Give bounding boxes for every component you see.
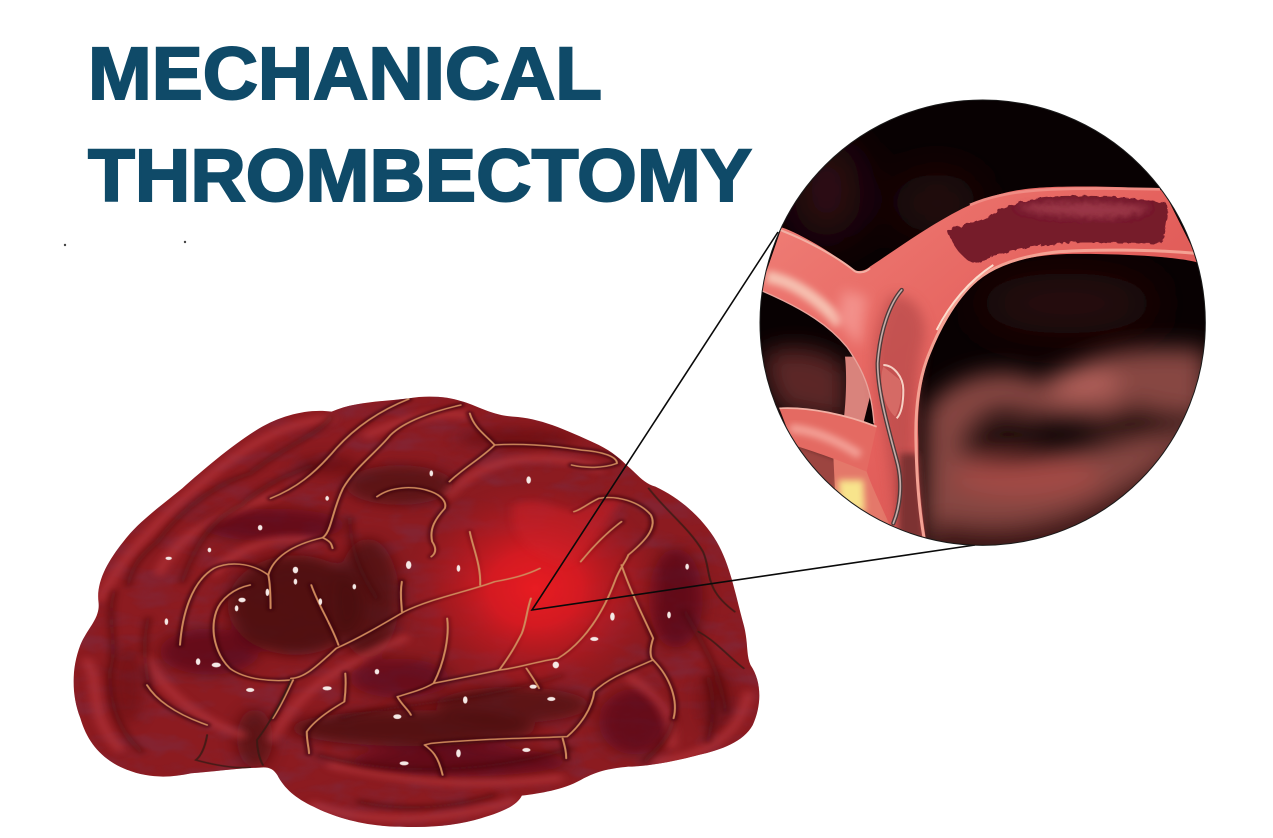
- brain: specular highlights: [165, 470, 689, 765]
- brain: dark lower veins: [196, 488, 744, 768]
- brain: veins: [147, 399, 675, 775]
- left lower backdrop: [798, 446, 835, 488]
- balloon catheter tip: [881, 365, 903, 418]
- title: MECHANICAL: [88, 32, 602, 115]
- blurred background brain: [763, 348, 1210, 560]
- vessel inner wall: [916, 250, 1197, 543]
- magnified circle: thrombus in cerebral artery: [750, 90, 1220, 560]
- brain: organic mottling: [74, 396, 760, 827]
- brain: vein shadows: [147, 399, 675, 775]
- vessel lower dark strip: [898, 453, 925, 543]
- brain: red ischemic glow: [414, 496, 658, 690]
- brain: dark fold lines: [110, 417, 726, 807]
- dark background: [760, 100, 1205, 545]
- title: [88, 32, 752, 217]
- brain: lighter gyri edges: [87, 414, 748, 818]
- vessel highlights: [767, 277, 840, 323]
- blood clot: [948, 196, 1168, 263]
- vertical vessel behind: [844, 356, 870, 422]
- title: THROMBECTOMY: [88, 134, 752, 217]
- lower-left branch vessel: [779, 408, 877, 472]
- stray print marks: [64, 241, 186, 246]
- brain: dark sulci shading: [112, 428, 735, 777]
- brain illustration: [74, 396, 760, 827]
- main Y vessel: [760, 186, 1200, 543]
- callout pointer lines: [532, 232, 975, 610]
- guide wire: [878, 290, 902, 523]
